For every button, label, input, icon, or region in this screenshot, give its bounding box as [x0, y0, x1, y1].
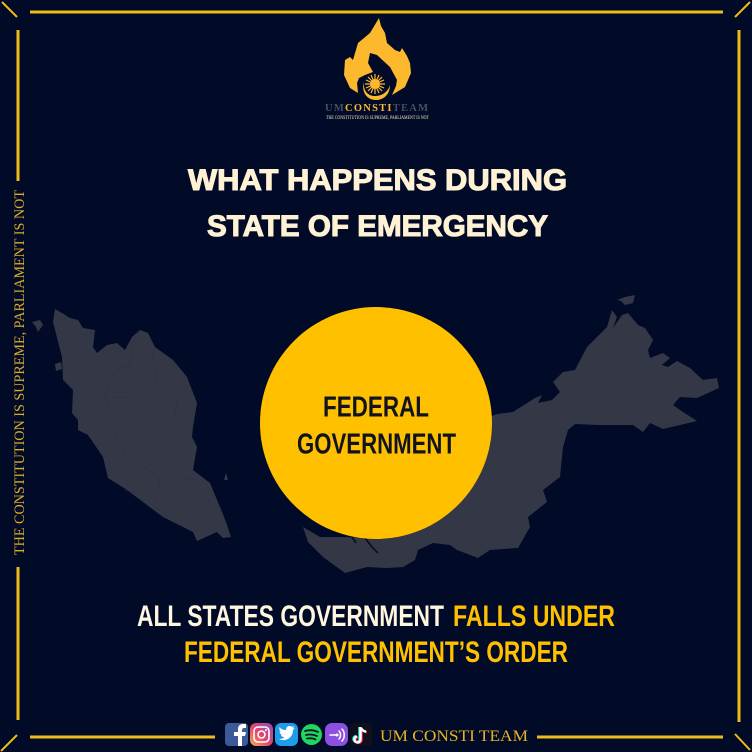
statement yellow part: FEDERAL GOVERNMENT’S ORDER — [184, 636, 568, 669]
footer label: UM CONSTI TEAM — [380, 728, 528, 745]
bottom statement — [137, 600, 615, 669]
title line 2: STATE OF EMERGENCY — [207, 210, 548, 243]
map: river inlet — [352, 537, 378, 553]
circle label: GOVERNMENT — [297, 428, 456, 460]
icon: tiktok — [350, 723, 372, 746]
map: peninsular Malaysia — [53, 309, 231, 541]
statement white part: ALL STATES GOVERNMENT — [137, 600, 444, 633]
icon: podcast — [325, 723, 348, 746]
title line 1: WHAT HAPPENS DURING — [188, 164, 567, 197]
logo crescent — [363, 82, 390, 100]
social media footer — [225, 723, 528, 746]
map: Borneo states — [303, 310, 719, 573]
logo flame — [344, 18, 411, 95]
statement yellow part — [184, 600, 615, 669]
logo tagline: THE CONSTITUTION IS SUPREME, PARLIAMENT IS NOT — [326, 115, 429, 121]
statement yellow part: FALLS UNDER — [453, 600, 615, 633]
map: state borders — [105, 345, 197, 510]
title — [188, 164, 567, 243]
logo sun — [365, 74, 385, 94]
circle label — [297, 392, 456, 460]
map of Malaysia — [32, 295, 719, 573]
vertical side slogan: THE CONSTITUTION IS SUPREME, PARLIAMENT IS NOT — [12, 190, 28, 555]
icon: spotify — [301, 724, 322, 745]
federal government circle — [260, 307, 492, 539]
logo wordmark: UMCONSTITEAM — [325, 103, 428, 114]
icon: facebook — [225, 723, 248, 746]
circle label: FEDERAL — [323, 392, 429, 424]
icon: instagram — [250, 723, 273, 746]
icon: twitter — [275, 723, 298, 746]
logo — [325, 18, 429, 121]
map: islands — [32, 295, 635, 480]
